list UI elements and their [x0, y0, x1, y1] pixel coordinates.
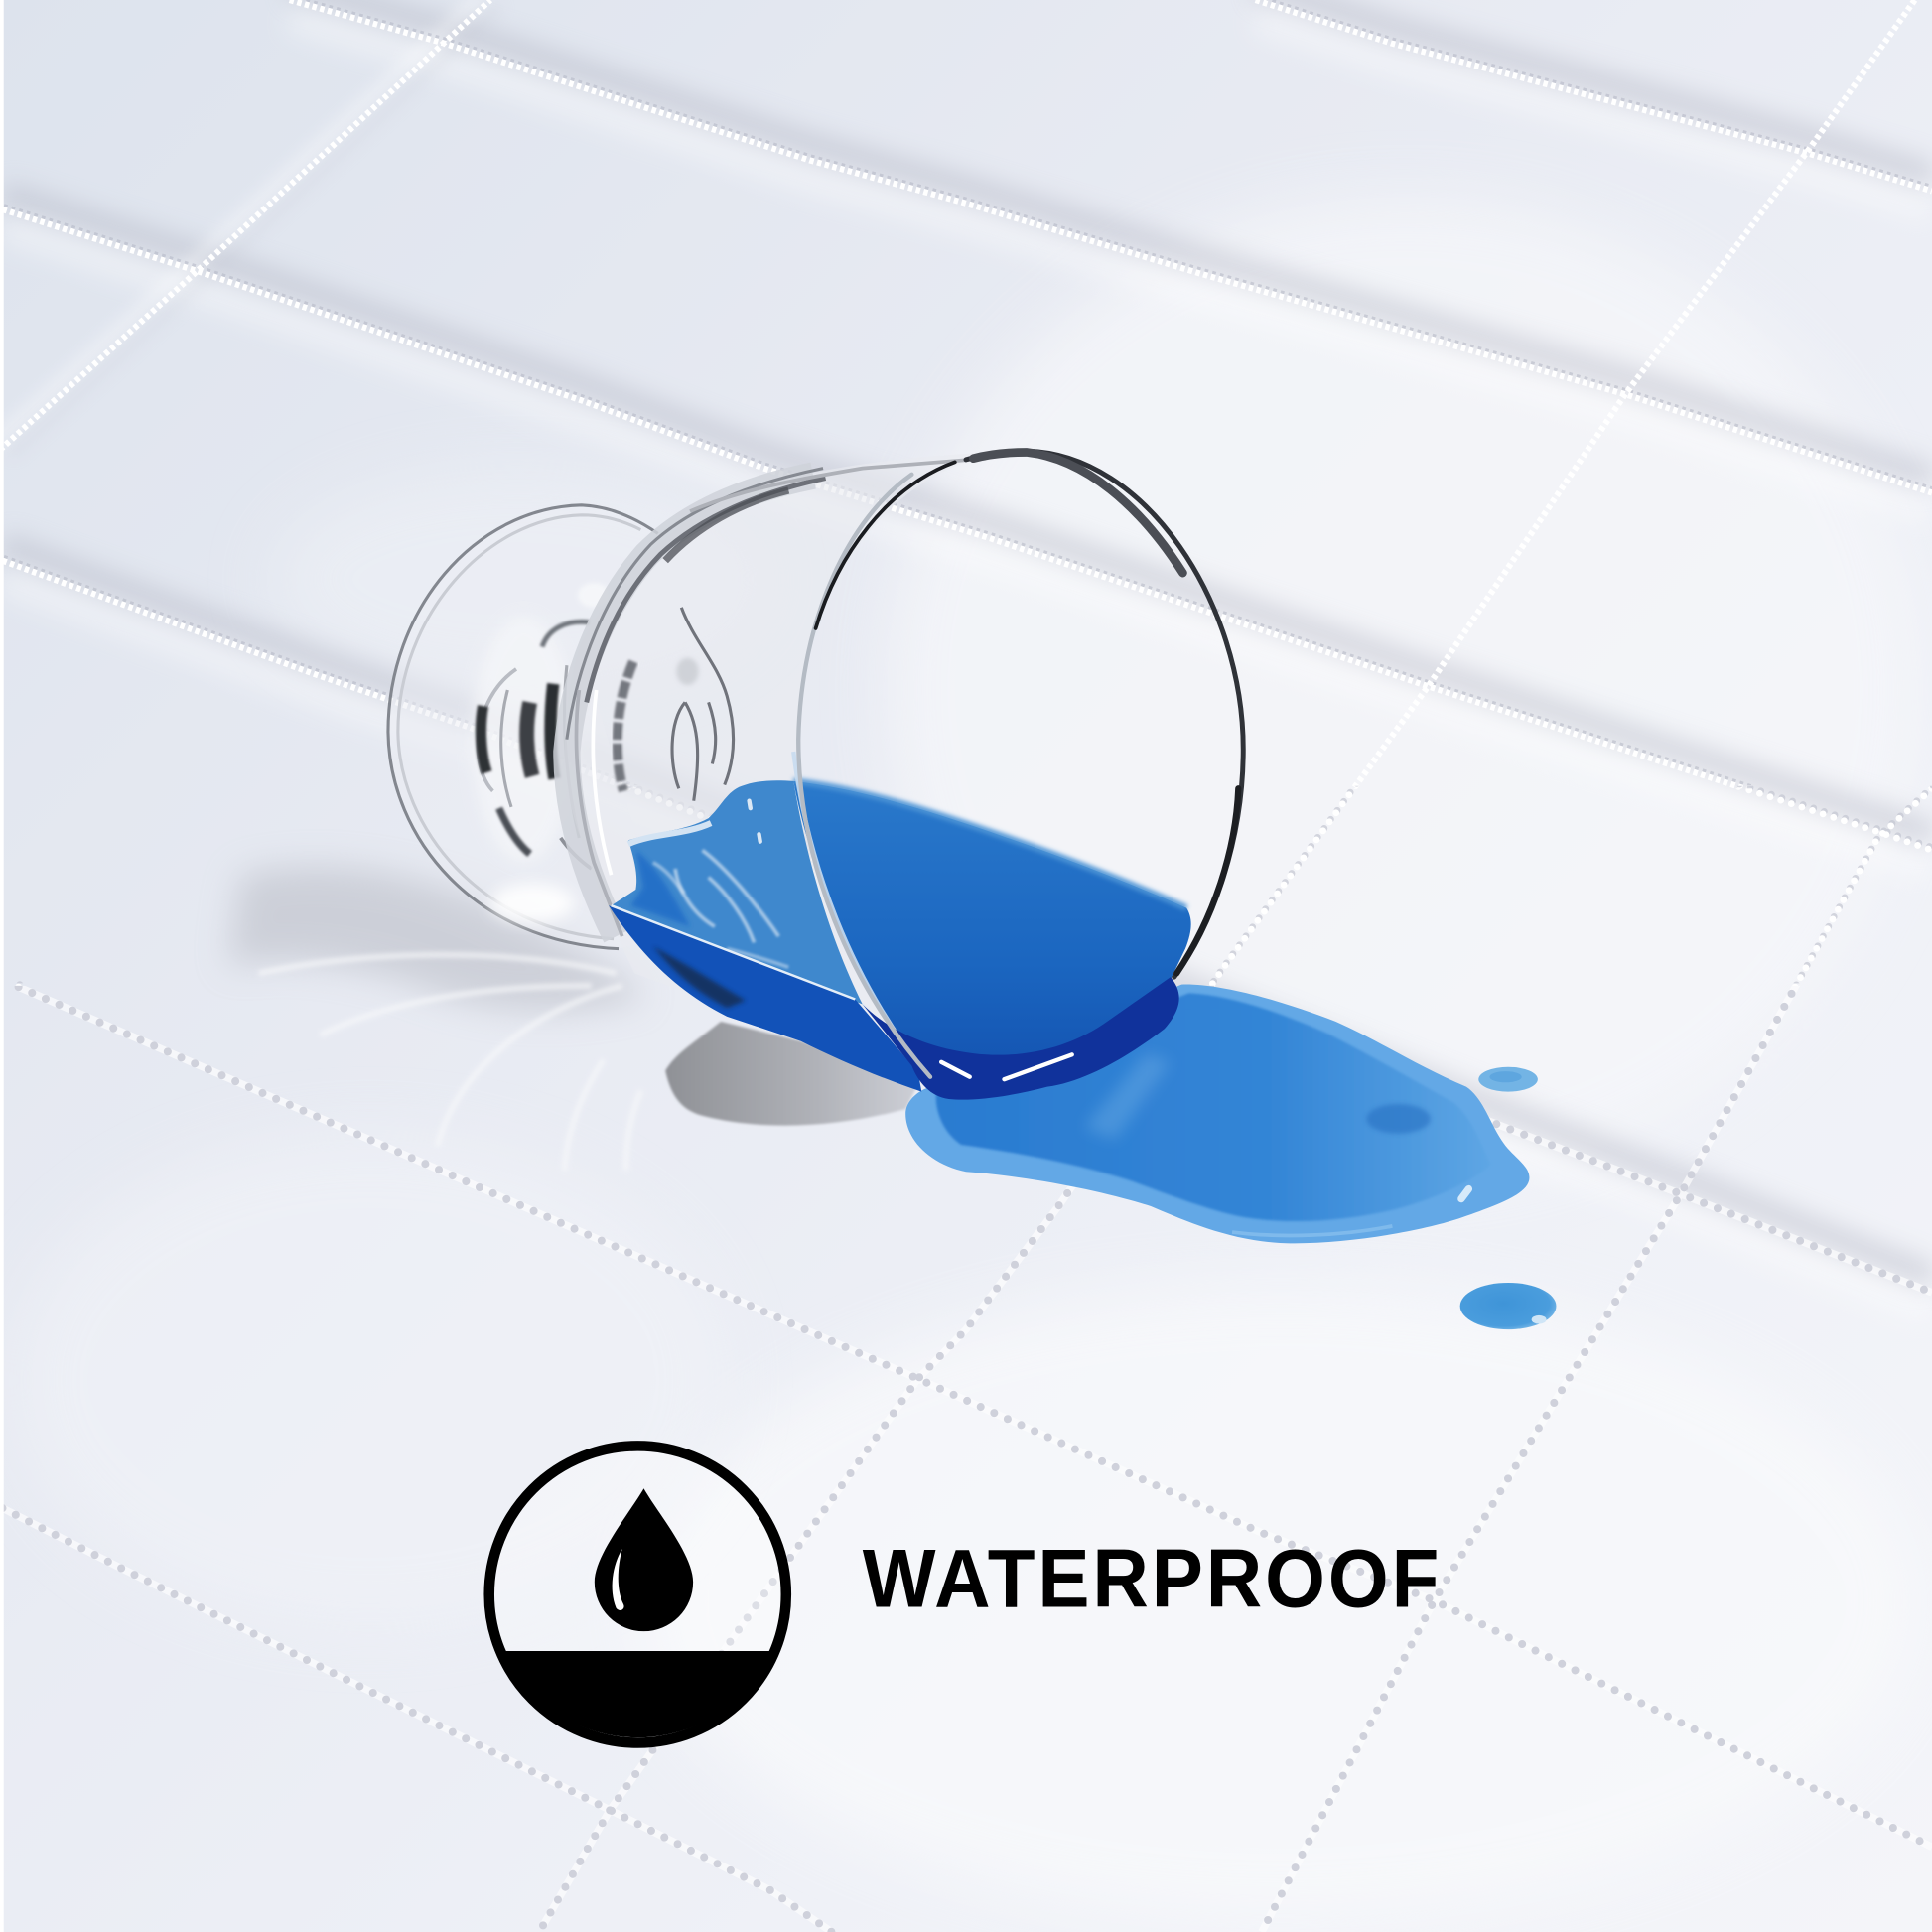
drop	[595, 1488, 693, 1631]
waterproof icon	[489, 1446, 786, 1742]
glass stem	[472, 617, 592, 869]
shadows under glass	[228, 867, 918, 1171]
glass tumbler	[388, 451, 1243, 1100]
left white margin	[0, 0, 4, 1932]
label: WATERPROOF: WATERPROOF	[863, 1533, 1442, 1625]
spilled water puddle	[905, 985, 1529, 1243]
glass foot	[388, 505, 665, 949]
water level	[502, 1651, 772, 1737]
water droplet large	[1460, 1283, 1556, 1329]
seam shading	[0, 0, 1932, 1310]
drop highlight	[613, 1549, 624, 1610]
water droplet small	[1478, 1067, 1538, 1092]
glass bowl	[565, 451, 1027, 1084]
teardrop reflection	[672, 608, 733, 801]
water inside glass	[609, 752, 1191, 1100]
dark pooled band	[863, 977, 1179, 1100]
glass rim	[798, 451, 1243, 1077]
